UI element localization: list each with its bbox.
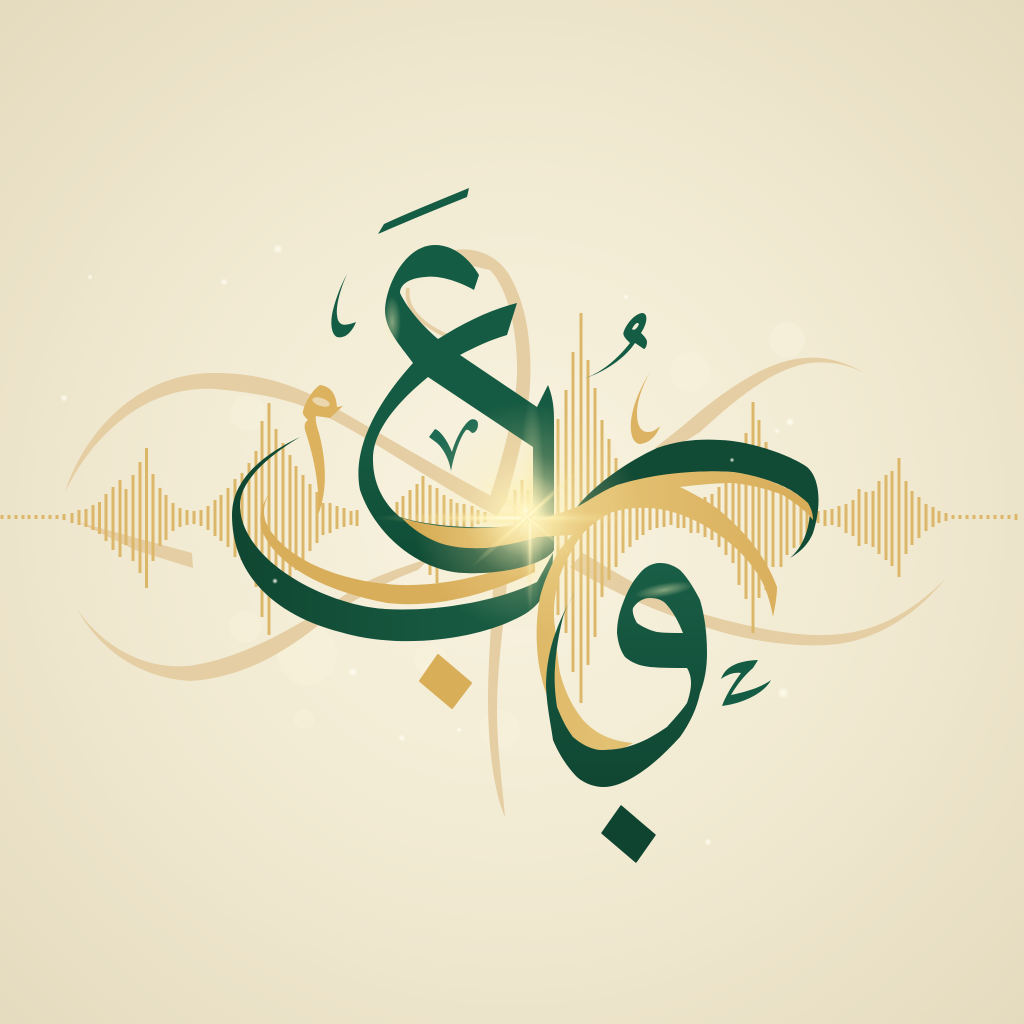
- light burst: [375, 402, 645, 632]
- gold main sweep with branch: [402, 471, 813, 752]
- diamond: green dot: [602, 806, 655, 862]
- mark: top diagonal stroke: [378, 188, 469, 234]
- mark: green ze shaped vowel: [721, 660, 771, 706]
- mark: gold alef with hamza: [303, 385, 343, 515]
- mark: small green crescent left: [331, 274, 356, 337]
- green waw: [546, 563, 707, 787]
- big green ba stroke: [232, 437, 553, 641]
- sparkles: [60, 244, 795, 846]
- sound wave bars: [2, 313, 1016, 703]
- green upper right swoosh: [577, 440, 819, 558]
- mark: green check shaped vowel: [429, 419, 478, 471]
- mark: small gold crescent right: [631, 372, 660, 444]
- diamond: gold dot: [420, 655, 471, 708]
- sheen highlights on letters: [383, 296, 695, 615]
- ribbons: pale tan flourishes: [65, 249, 946, 817]
- mark: small green waw top right: [583, 313, 647, 379]
- green letter ain: [358, 245, 554, 573]
- bokeh lights: [229, 322, 805, 750]
- gold inner ba stroke: [260, 492, 535, 604]
